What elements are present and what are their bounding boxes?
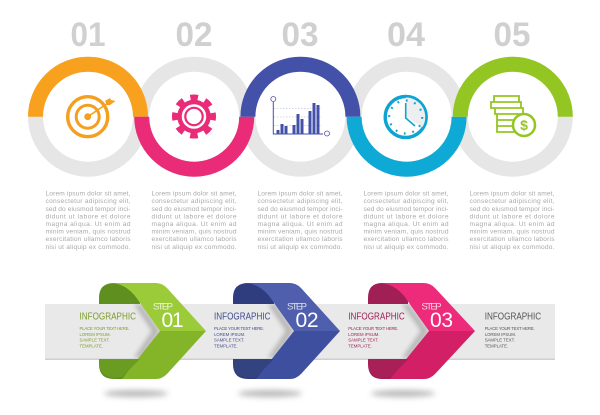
ribbon: step 3 pink [368,283,475,379]
lorem text columns: Lorem ipsum dolor sit amet, [152,191,237,198]
lorem text columns: nisi ut aliquip ex commodo. [152,244,237,251]
lorem text columns: consectetur adipiscing elit, [364,198,449,205]
band text: step 2: PLACE YOUR TEXT HERE. [214,326,264,331]
step 2 number: 02 [296,309,318,332]
band text: step 2: TEMPLATE. [214,343,238,348]
step numbers: 05 [494,16,530,54]
band text: step 3: INFOGRAPHIC [348,312,405,322]
band text: final: SAMPLE TEXT. [485,338,515,343]
band text: step 2: SAMPLE TEXT. [214,338,244,343]
band text: step 2: INFOGRAPHIC [214,312,270,322]
lorem text columns: magna aliqua. Ut enim ad [470,221,555,228]
lorem text columns: Lorem ipsum dolor sit amet, [364,191,449,198]
lorem text columns: sed do eiusmod tempor inci- [364,206,448,213]
lorem text columns: exercitation ullamco laboris [470,236,555,243]
band text: step 2 [214,312,270,348]
lorem text columns: didunt ut labore et dolore [470,213,555,220]
icon: bar chart [271,96,330,136]
lorem text columns: minim veniam, quis nostrud [46,229,131,236]
lorem text columns [46,191,555,251]
lorem text columns: minim veniam, quis nostrud [364,229,449,236]
lorem text columns: magna aliqua. Ut enim ad [46,221,131,228]
icon: target [68,97,116,137]
band text: step 1: LOREM IPSUM. [80,332,111,337]
lorem text columns: minim veniam, quis nostrud [258,229,343,236]
lorem text columns: consectetur adipiscing elit, [152,198,237,205]
lorem text columns: didunt ut labore et dolore [258,213,343,220]
band text: step 3: TEMPLATE. [348,343,372,348]
step numbers: 03 [282,16,318,54]
band text: step 1: INFOGRAPHIC [80,312,136,322]
lorem text columns: consectetur adipiscing elit, [46,198,131,205]
lorem text columns: Lorem ipsum dolor sit amet, [470,191,555,198]
band text: step 1: SAMPLE TEXT. [80,338,110,343]
lorem text columns: consectetur adipiscing elit, [470,198,555,205]
lorem text columns: didunt ut labore et dolore [46,213,131,220]
lorem text columns: Lorem ipsum dolor sit amet, [46,191,131,198]
lorem text columns: consectetur adipiscing elit, [258,198,343,205]
lorem text columns: magna aliqua. Ut enim ad [258,221,343,228]
icon: gear [175,98,213,136]
ground shadows [104,390,435,397]
band text: final: PLACE YOUR TEXT HERE. [485,326,535,331]
ribbon: step 1 green [99,283,206,379]
gray band [45,304,555,360]
band text: final: TEMPLATE. [485,343,508,348]
lorem text columns: minim veniam, quis nostrud [470,229,555,236]
gray rings [36,64,565,169]
step numbers [70,16,530,54]
step 1 number: 01 [162,309,184,332]
step numbers: 01 [70,16,106,54]
lorem text columns: didunt ut labore et dolore [152,213,237,220]
step numbers: 02 [176,16,212,54]
step 2 label: STEP [287,302,307,312]
step numbers: 04 [387,16,425,54]
icon: clock [385,96,426,138]
lorem text columns: nisi ut aliquip ex commodo. [46,244,131,251]
lorem text columns: minim veniam, quis nostrud [152,229,237,236]
band text: final: INFOGRAPHIC [485,312,541,322]
band text: step 2: LOREM IPSUM. [214,332,245,337]
lorem text columns: magna aliqua. Ut enim ad [152,221,237,228]
lorem text columns: nisi ut aliquip ex commodo. [364,244,449,251]
lorem text columns: exercitation ullamco laboris [46,236,131,243]
band text: step 1: TEMPLATE. [80,343,103,348]
band text: step 1: PLACE YOUR TEXT HERE. [80,326,130,331]
band text: step 3: SAMPLE TEXT. [348,338,379,343]
lorem text columns: sed do eiusmod tempor inci- [470,206,554,213]
ribbon back folds [99,283,408,379]
lorem text columns: exercitation ullamco laboris [364,236,449,243]
band text: step 1 [80,312,136,348]
icon: coins [491,96,535,136]
step 3 number: 03 [430,309,453,332]
lorem text columns: sed do eiusmod tempor inci- [46,206,130,213]
lorem text columns: exercitation ullamco laboris [152,236,237,243]
band text: final [485,312,541,348]
icon: coins: $ [520,117,528,133]
band text: step 3: LOREM IPSUM. [348,332,380,337]
lorem text columns: exercitation ullamco laboris [258,236,343,243]
ribbon: step 2 blue [233,283,340,379]
band text: final: LOREM IPSUM. [485,332,516,337]
lorem text columns: magna aliqua. Ut enim ad [364,221,449,228]
colored arcs [36,64,565,169]
step 3 label: STEP [422,302,442,312]
ribbon shadows on band [134,304,429,358]
step 1 label: STEP [153,302,173,312]
lorem text columns: nisi ut aliquip ex commodo. [470,244,555,251]
lorem text columns: sed do eiusmod tempor inci- [152,206,236,213]
band text: step 3 [348,312,405,348]
lorem text columns: Lorem ipsum dolor sit amet, [258,191,343,198]
lorem text columns: sed do eiusmod tempor inci- [258,206,342,213]
lorem text columns: nisi ut aliquip ex commodo. [258,244,343,251]
band text: step 3: PLACE YOUR TEXT HERE. [348,326,398,331]
lorem text columns: didunt ut labore et dolore [364,213,449,220]
